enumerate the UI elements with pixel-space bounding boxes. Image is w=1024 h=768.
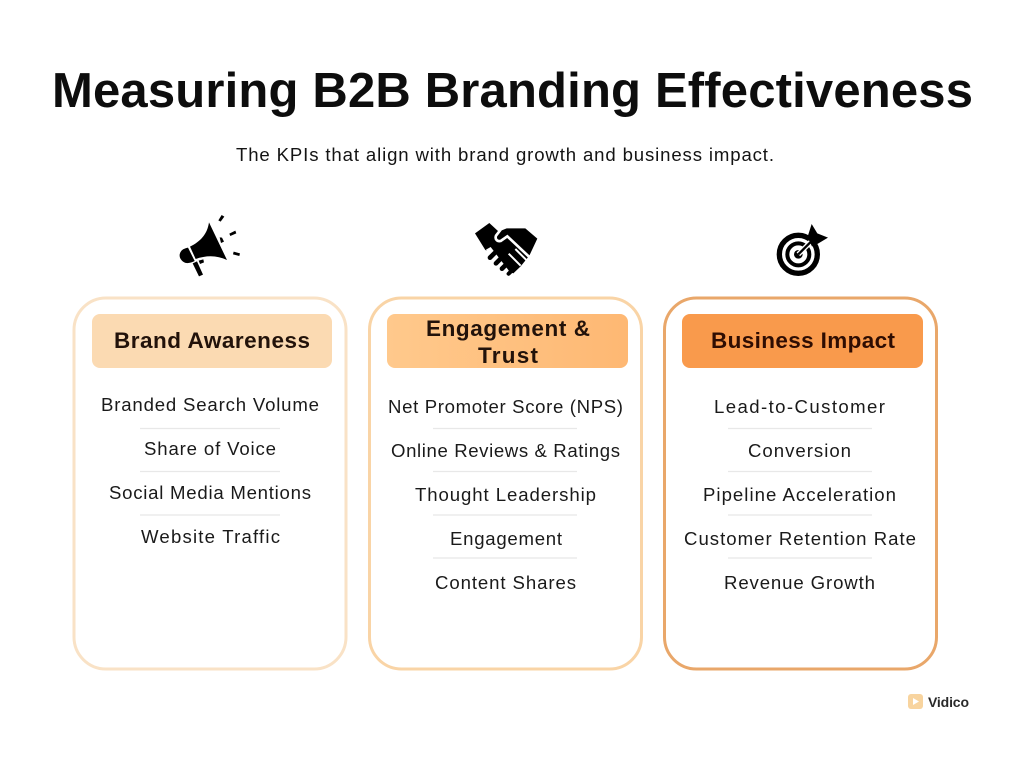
KPI list: engagement and trust: Engagement	[450, 528, 563, 549]
logo: Vidico: Vidico	[928, 694, 969, 710]
KPI list: business impact: Customer Retention Rate	[684, 528, 916, 549]
KPI list: business impact: Conversion	[748, 440, 851, 461]
KPI list: business impact: Pipeline Acceleration	[703, 484, 896, 505]
KPI list: brand awareness: Social Media Mentions	[109, 482, 311, 503]
KPI list: business impact: Revenue Growth	[724, 572, 875, 593]
icon: handshake	[475, 223, 537, 277]
KPI list: business impact	[684, 396, 916, 593]
KPI list: business impact: Lead-to-Customer	[714, 396, 885, 417]
KPI list: engagement and trust: Online Reviews & Ratings	[391, 440, 620, 461]
KPI list: brand awareness	[101, 394, 319, 547]
icon: megaphone	[180, 215, 240, 276]
KPI list: engagement and trust: Thought Leadership	[415, 484, 596, 505]
panel: engagement and trust	[370, 298, 642, 669]
heading: business impact: Business Impact	[711, 328, 896, 353]
subtitle: The KPIs that align with brand growth and business impact.	[236, 144, 774, 165]
KPI list: engagement and trust: Net Promoter Score (NPS)	[388, 396, 623, 417]
heading: business impact	[682, 314, 923, 368]
heading: brand awareness	[92, 314, 332, 368]
KPI list: engagement and trust: Content Shares	[435, 572, 576, 593]
logo: Vidico	[908, 694, 969, 710]
KPI list: brand awareness: Website Traffic	[141, 526, 280, 547]
panel: brand awareness	[74, 298, 346, 669]
heading: brand awareness: Brand Awareness	[114, 328, 310, 353]
KPI list: brand awareness: Branded Search Volume	[101, 394, 319, 415]
icon: target with dart	[779, 224, 828, 273]
KPI list: engagement and trust	[388, 396, 623, 593]
heading: engagement and trust: Trust	[478, 343, 538, 368]
heading: engagement and trust	[387, 314, 628, 368]
heading: engagement and trust: Engagement &	[426, 316, 590, 341]
panel: business impact	[664, 298, 936, 669]
KPI list: brand awareness: Share of Voice	[144, 438, 276, 459]
title: Measuring B2B Branding Effectiveness	[52, 64, 973, 118]
